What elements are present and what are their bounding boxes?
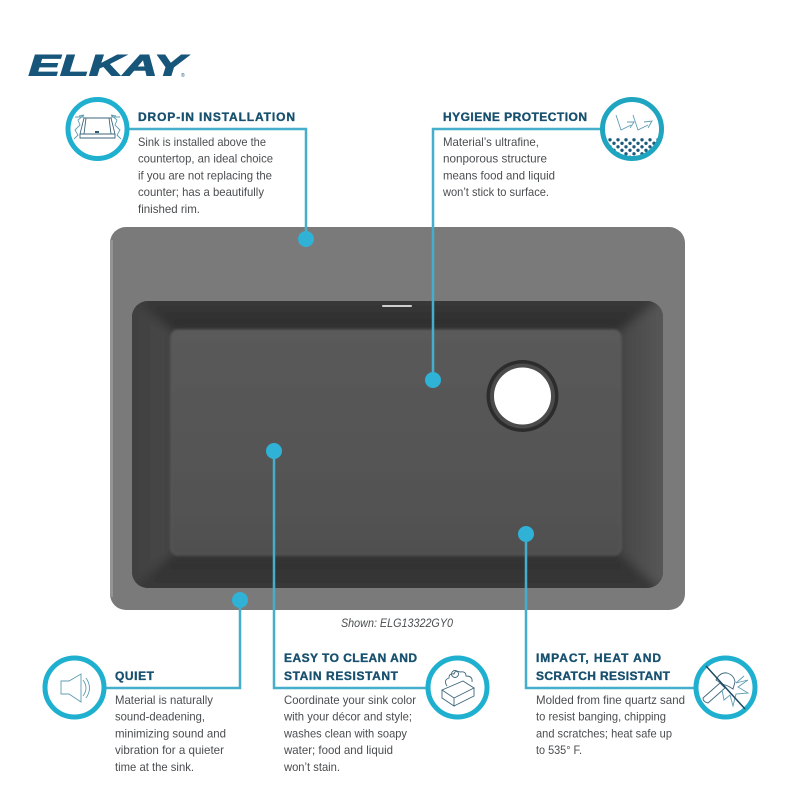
heading: easy to clean: STAIN RESISTANT <box>284 669 399 683</box>
text: easy to clean <box>283 694 416 774</box>
text: hygiene: means food and liquid <box>443 169 555 182</box>
text: drop-in: counter; has a beautifully <box>138 186 264 199</box>
text: easy to clean: with your décor and style; <box>283 711 412 724</box>
heading: impact: IMPACT, HEAT AND <box>536 651 661 665</box>
icon: drop-in sink <box>68 100 127 158</box>
logo: Elkay: ELKAY <box>28 50 190 82</box>
leader line: drop-in <box>129 129 314 247</box>
leader line: hygiene <box>425 129 602 388</box>
text: drop-in: countertop, an ideal choice <box>138 153 273 166</box>
text: quiet: time at the sink. <box>115 761 194 774</box>
text: quiet: sound-deadening, <box>115 711 205 724</box>
leader line: quiet <box>104 592 248 688</box>
text: impact <box>536 694 685 757</box>
text: easy to clean: washes clean with soapy <box>283 727 407 740</box>
text: impact: and scratches; heat safe up <box>536 727 672 740</box>
callout: hygiene protection <box>425 100 664 388</box>
drain <box>486 360 558 432</box>
text: drop-in: finished rim. <box>138 203 200 216</box>
callout: impact, heat and scratch <box>518 526 755 757</box>
logo: Elkay <box>28 50 190 82</box>
icon: no hammer <box>696 658 755 717</box>
text: quiet: Material is naturally <box>115 694 213 707</box>
text: impact: to resist banging, chipping <box>536 711 666 724</box>
text: drop-in: Sink is installed above the <box>138 136 266 149</box>
leader line: impact <box>518 526 696 688</box>
heading: hygiene: HYGIENE PROTECTION <box>443 110 587 124</box>
logo: Elkay: ® <box>181 72 185 79</box>
icon: speaker <box>45 658 104 717</box>
text: drop-in: if you are not replacing the <box>138 169 272 182</box>
text: impact: Molded from fine quartz sand <box>536 694 685 707</box>
text: easy to clean: Coordinate your sink color <box>284 694 416 707</box>
text: hygiene <box>442 136 555 199</box>
icon: soap bar <box>428 658 487 717</box>
text: drop-in <box>138 136 273 216</box>
heading: easy to clean <box>284 651 417 683</box>
text: hygiene: nonporous structure <box>443 153 547 166</box>
sink photo <box>110 227 685 610</box>
text: quiet: vibration for a quieter <box>115 744 224 757</box>
text: quiet <box>115 694 226 774</box>
leader line: easy to clean <box>266 443 428 688</box>
text: quiet: minimizing sound and <box>115 727 226 740</box>
text: easy to clean: water; food and liquid <box>283 744 393 757</box>
heading: easy to clean: EASY TO CLEAN AND <box>284 651 417 665</box>
text: hygiene: Material’s ultrafine, <box>443 136 539 149</box>
heading: quiet: QUIET <box>115 669 155 683</box>
text: impact: to 535° F. <box>536 744 582 757</box>
heading: impact <box>536 651 671 683</box>
callout: easy to clean <box>266 443 487 774</box>
caption: Shown: ELG13322GY0 <box>341 618 454 630</box>
callout: drop-in installation <box>68 100 314 247</box>
text: easy to clean: won’t stain. <box>283 761 340 774</box>
callout: quiet <box>45 592 248 774</box>
sink logo mark <box>382 305 412 307</box>
heading: impact: SCRATCH RESISTANT <box>536 669 671 683</box>
heading: drop-in: DROP-IN INSTALLATION <box>138 110 295 124</box>
icon: nonporous surface <box>600 100 664 164</box>
text: hygiene: won’t stick to surface. <box>442 186 549 199</box>
